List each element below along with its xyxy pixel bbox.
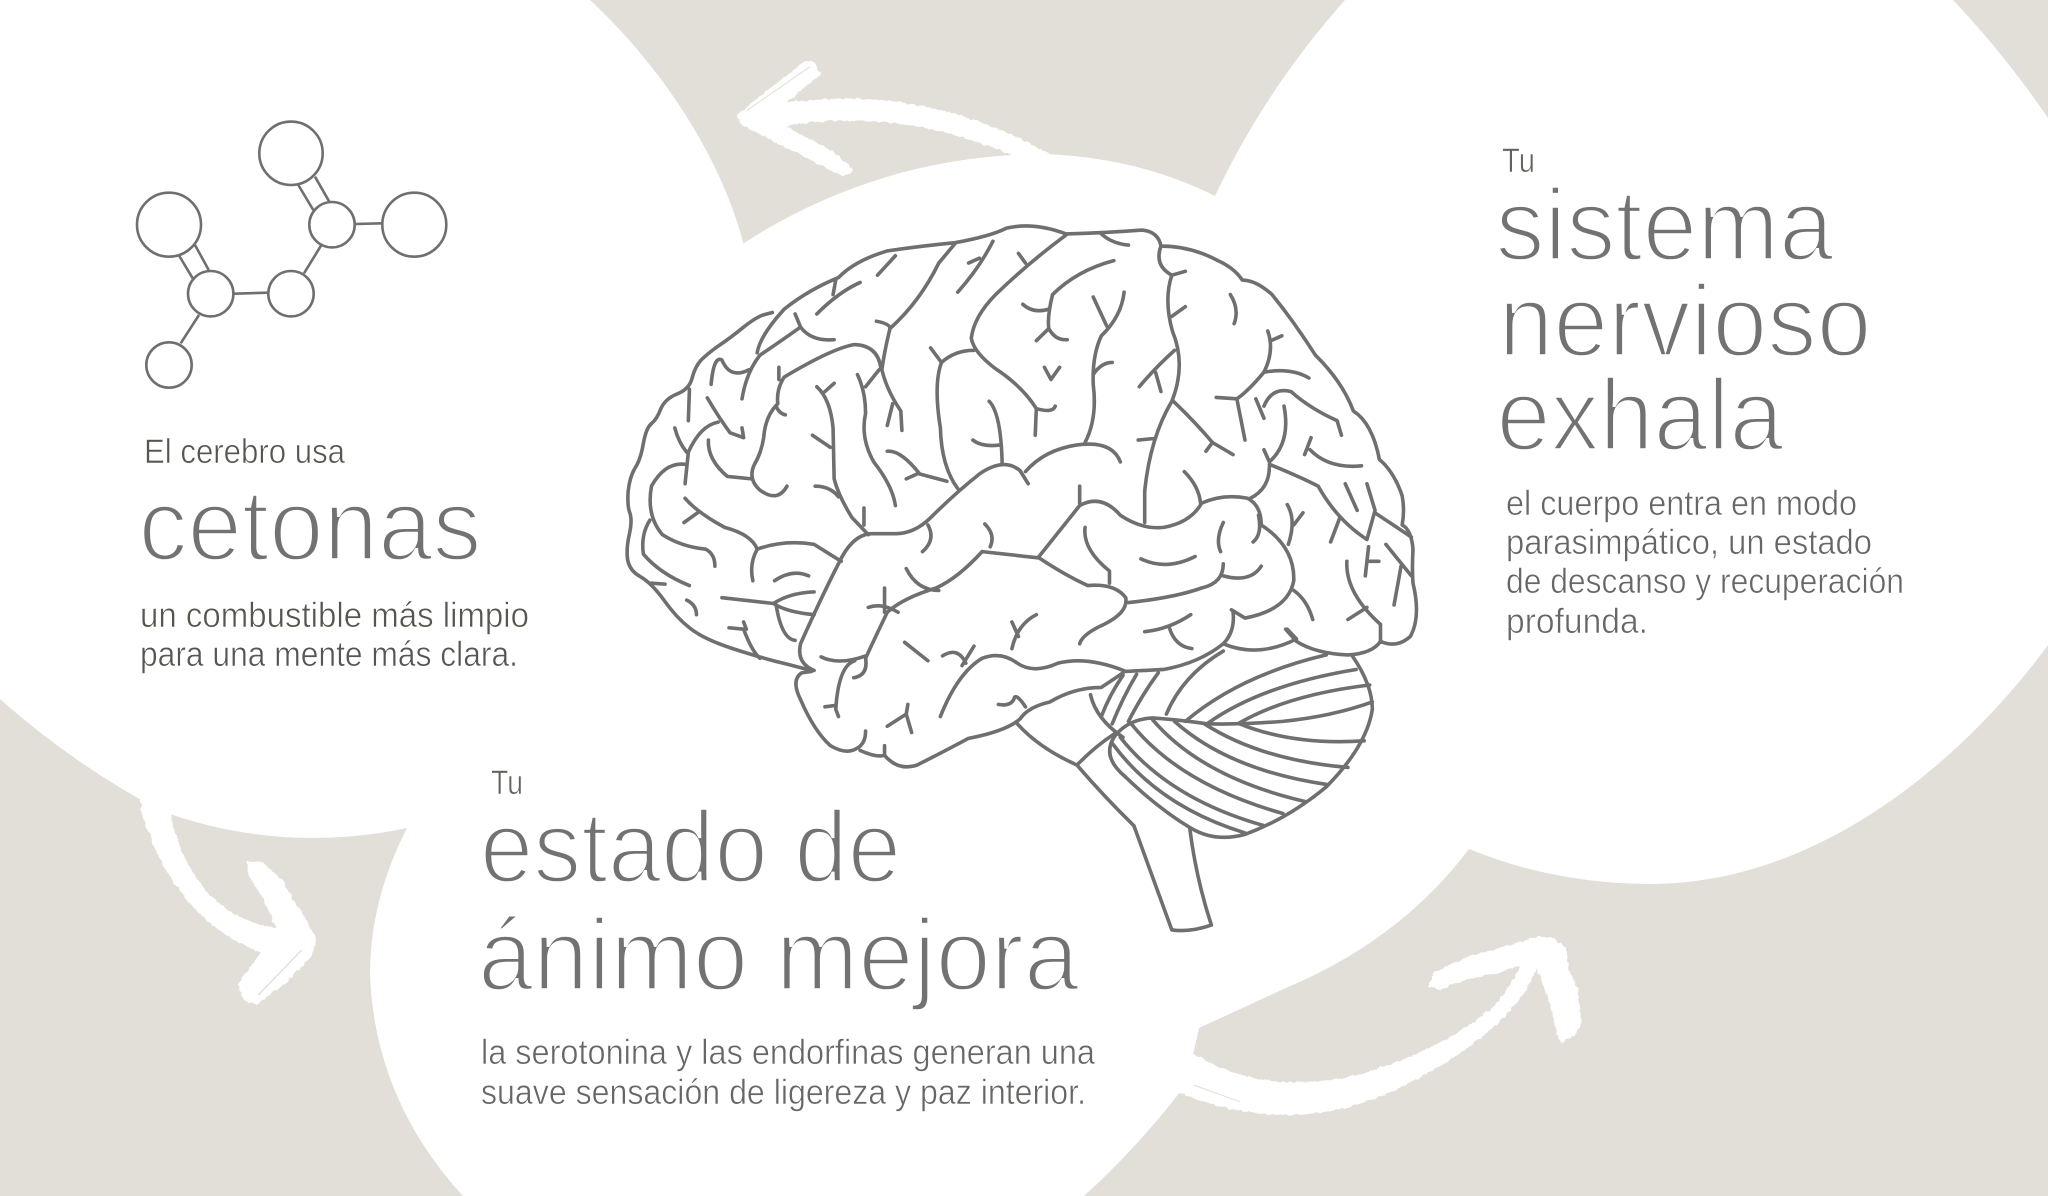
text block: sistema nervioso: exhala	[1496, 358, 1784, 472]
text block: cetonas: para una mente más clara.	[140, 635, 518, 674]
arrow: bottom right, pointing up	[1180, 937, 1580, 1114]
panel: left circle, cetonas	[0, 0, 800, 838]
icon: brain line drawing	[627, 226, 1416, 931]
text block: estado de animo: suave sensación de ligereza y paz interior.	[481, 1073, 1086, 1112]
panel: right circle, sistema nervioso	[1215, 0, 2048, 884]
arrow: left, pointing right	[142, 802, 315, 1003]
text block: estado de animo: Tu	[491, 764, 523, 802]
text block: estado de animo	[478, 764, 1095, 1112]
text block: sistema nervioso: nervioso	[1498, 264, 1872, 378]
text block: sistema nervioso: el cuerpo entra en modo	[1506, 484, 1857, 523]
text block: cetonas: El cerebro usa	[144, 433, 345, 471]
text block: sistema nervioso: sistema	[1496, 168, 1834, 282]
icon: ketone molecule	[137, 122, 446, 388]
text block: cetonas: un combustible más limpio	[140, 596, 529, 635]
panel: central circle, brain and estado de animo	[370, 154, 1600, 1196]
text block: sistema nervioso	[1496, 142, 1904, 641]
text block: cetonas	[138, 433, 529, 674]
text block: sistema nervioso: Tu	[1502, 142, 1535, 180]
text block: sistema nervioso: de descanso y recuperación	[1506, 562, 1904, 601]
arrow: top, pointing left	[738, 62, 1048, 175]
text block: estado de animo: estado de	[480, 790, 901, 904]
text block: estado de animo: la serotonina y las endorfinas generan una	[481, 1033, 1095, 1072]
text block: cetonas: cetonas	[138, 468, 482, 582]
text block: sistema nervioso: profunda.	[1506, 602, 1648, 641]
text block: estado de animo: ánimo mejora	[478, 898, 1079, 1012]
text block: sistema nervioso: parasimpático, un estado	[1506, 523, 1872, 562]
